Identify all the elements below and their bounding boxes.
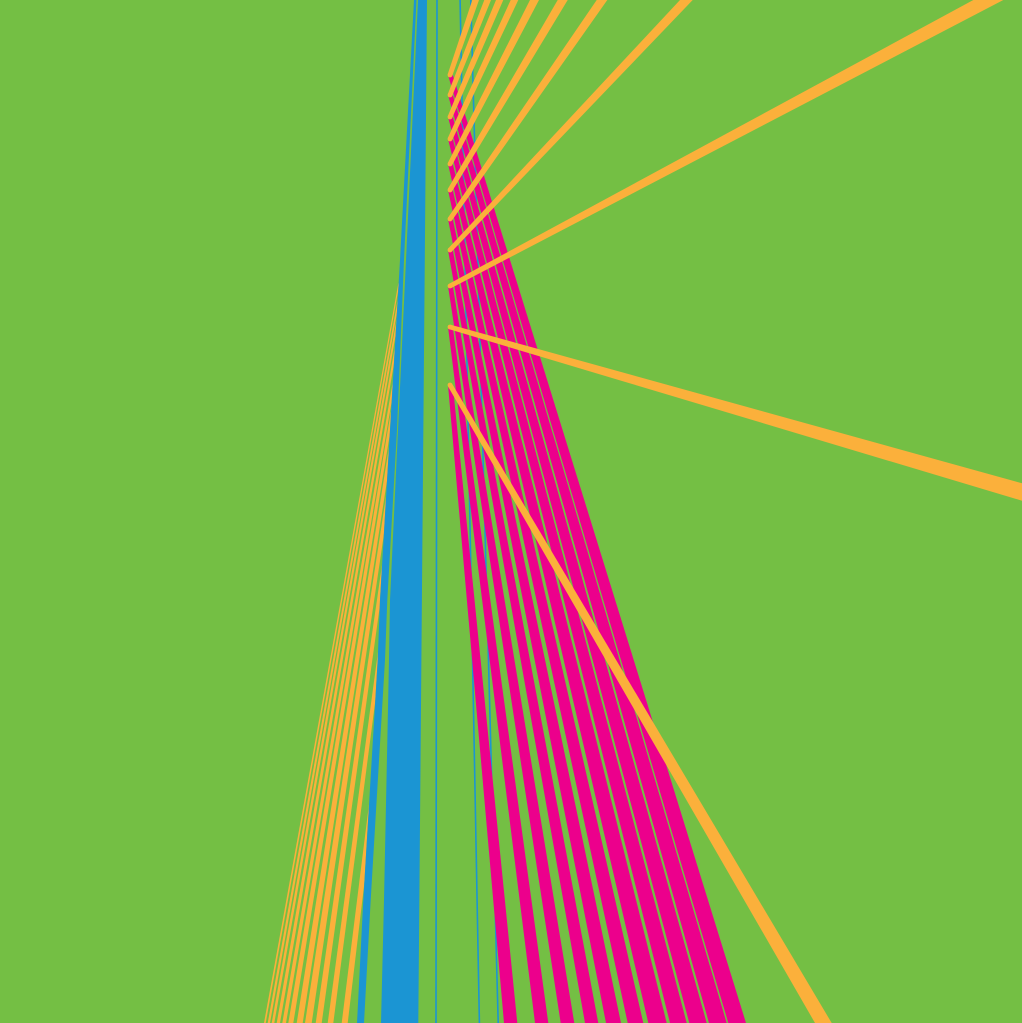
blue thin lines: [435, 0, 499, 1023]
blue wide band: [381, 0, 427, 1023]
right fan: pink bands: [448, 75, 746, 1023]
right fan: orange rays: [448, 0, 1022, 1023]
artwork: converging coloured lines: [264, 0, 1022, 1023]
blue slim band: [357, 0, 416, 1023]
left fan: orange lines: [264, 283, 400, 1023]
